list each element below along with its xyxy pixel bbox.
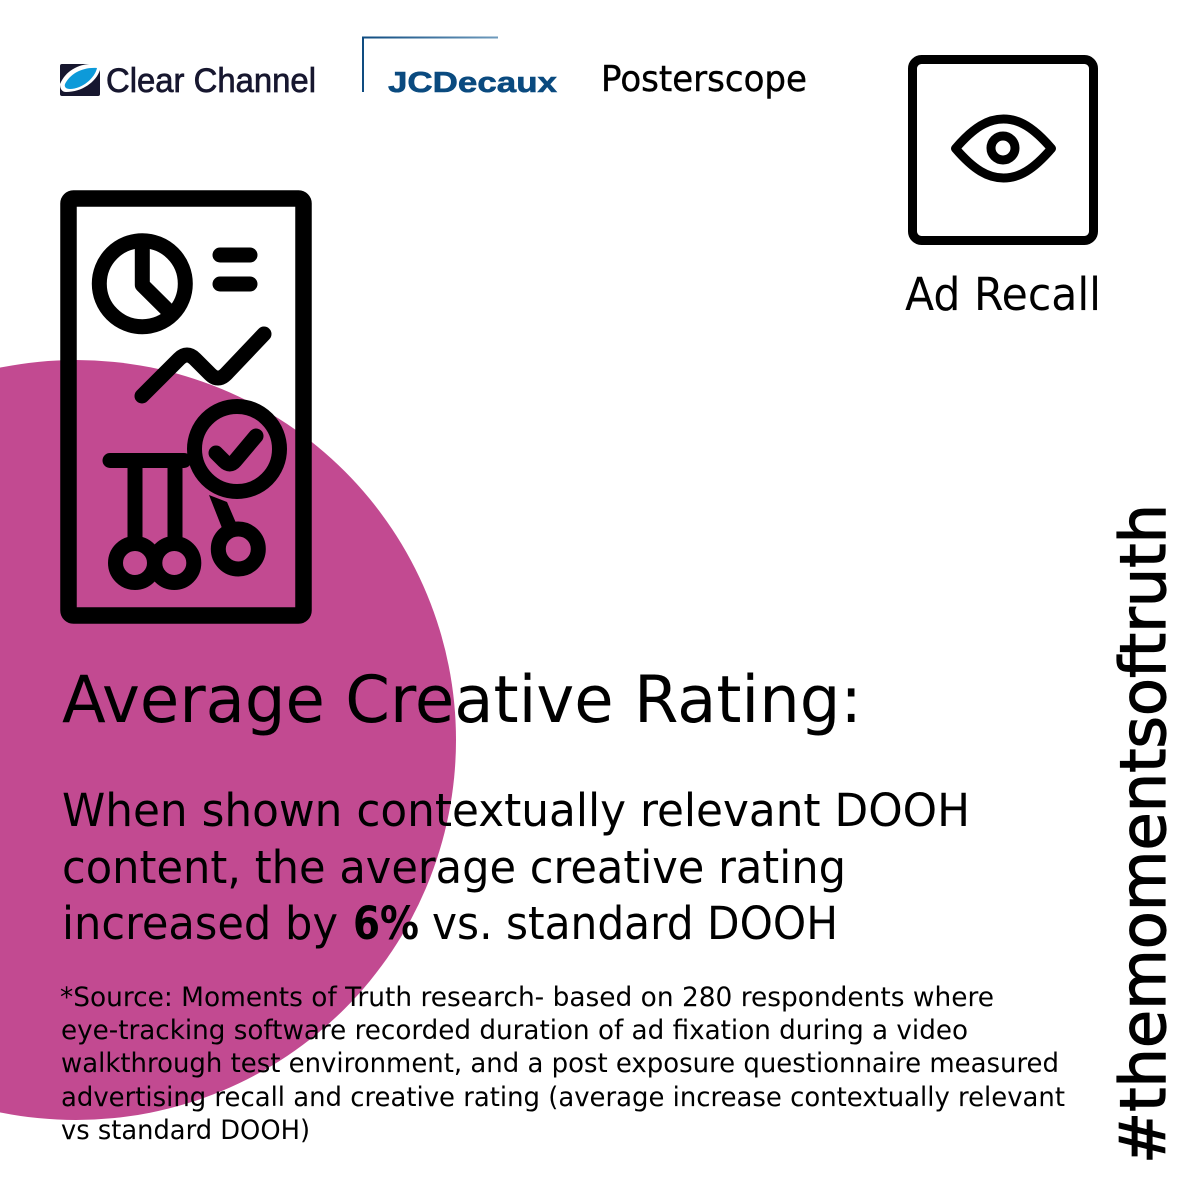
text block: source note: advertising recall and creative rating (average increase contextually relevant — [61, 1082, 1065, 1113]
text block: source note: *Source: Moments of Truth research- based on 280 respondents where — [60, 982, 994, 1013]
hashtag: vertical: #themomentsoftruth — [1107, 504, 1180, 1164]
text block: source note — [60, 982, 1065, 1146]
text block: source note: eye-tracking software recorded duration of ad fixation during a video — [61, 1015, 968, 1046]
label: Ad Recall: Ad Recall — [905, 268, 1101, 321]
text block: main statement: increased by — [62, 897, 338, 950]
logo: Posterscope: Posterscope — [601, 59, 807, 100]
text block: main statement: 6% — [353, 897, 419, 950]
logo: JCDecaux: JCDecaux — [388, 67, 557, 99]
logo: Clear Channel: Clear Channel — [106, 62, 316, 100]
logo: JCDecaux — [363, 38, 557, 99]
icon: eye in square — [912, 60, 1094, 240]
text block: main statement: When shown contextually relevant DOOH — [62, 784, 970, 837]
icon: report document — [68, 198, 304, 616]
background circle — [0, 360, 456, 1120]
text block: main statement — [62, 784, 970, 950]
text block: source note: vs standard DOOH) — [61, 1115, 310, 1146]
text block: source note: walkthrough test environment, and a post exposure questionnaire measured — [61, 1048, 1059, 1079]
heading: Average Creative Rating: — [62, 663, 862, 738]
text block: main statement: vs. standard DOOH — [432, 897, 838, 950]
text block: main statement: content, the average creative rating — [62, 841, 846, 894]
